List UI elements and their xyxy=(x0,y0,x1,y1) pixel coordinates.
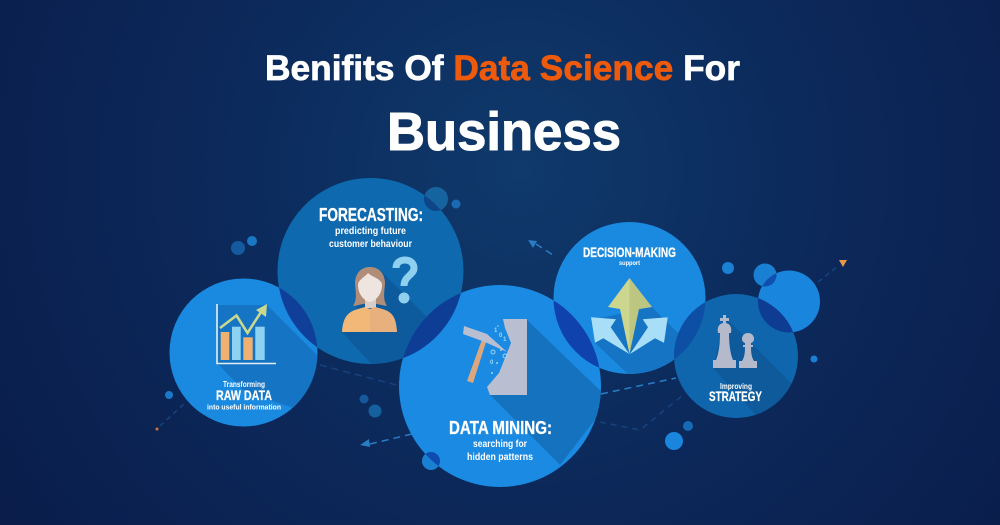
decision disc xyxy=(554,222,706,374)
dot: orange lower left xyxy=(156,428,158,430)
icon: chess king xyxy=(713,315,736,368)
icon: three arrows xyxy=(591,278,668,354)
icon: binary chips: 1 xyxy=(494,328,498,334)
decorative dots xyxy=(165,187,818,470)
icon: person xyxy=(342,267,397,332)
title line two: Business xyxy=(387,102,621,162)
title xyxy=(265,49,740,162)
overlap lenses xyxy=(279,196,793,466)
panel: forecasting xyxy=(278,178,464,364)
icon: pickaxe xyxy=(463,326,507,383)
arrowhead: orange top right xyxy=(839,260,847,267)
dashed connector lines xyxy=(160,244,838,444)
title line one: Benifits Of Data Science For xyxy=(265,49,740,88)
arrowhead: left of data mining xyxy=(360,439,370,447)
icon: question mark xyxy=(396,260,414,304)
icon: binary chips: 1 xyxy=(503,337,507,343)
icon: binary chips: 0 xyxy=(499,333,503,339)
arrowhead: upper left of decision-making xyxy=(528,240,537,248)
forecasting subtext two: customer behaviour xyxy=(329,238,412,250)
icon: bar chart xyxy=(217,304,276,364)
panel: data mining xyxy=(399,285,610,487)
data mining long shadow xyxy=(490,320,610,465)
panel: strategy xyxy=(674,294,798,418)
raw data heading: RAW DATA xyxy=(216,387,272,403)
raw data text: Transforming xyxy=(223,380,265,389)
data mining subtext: searching for xyxy=(473,438,527,450)
panel: raw data xyxy=(170,278,330,426)
forecasting subtext: predicting future xyxy=(335,225,406,237)
icon: binary chips xyxy=(490,325,507,374)
raw data disc xyxy=(170,278,318,426)
forecasting long shadow xyxy=(342,270,426,364)
decision subtext: support xyxy=(619,260,641,267)
strategy heading: STRATEGY xyxy=(709,388,762,404)
strategy long shadow xyxy=(713,321,792,415)
icon: chess pawn xyxy=(739,333,757,368)
icon: binary chips: 0 xyxy=(490,360,494,366)
raw data long shadow xyxy=(218,305,318,408)
panel: decision-making xyxy=(554,222,706,374)
circle: far right blue bubble xyxy=(758,270,820,332)
raw data subtext: into useful information xyxy=(207,402,281,412)
decision heading: DECISION-MAKING xyxy=(583,245,676,260)
data mining subtext two: hidden patterns xyxy=(467,451,533,463)
strategy disc xyxy=(674,294,798,418)
data mining disc xyxy=(399,285,601,487)
decision long shadow xyxy=(591,307,678,374)
strategy text: Improving xyxy=(720,381,752,391)
forecasting heading: FORECASTING: xyxy=(319,205,423,225)
forecasting disc xyxy=(278,178,464,364)
icon: rock xyxy=(487,319,527,395)
data mining heading: DATA MINING: xyxy=(449,418,552,438)
